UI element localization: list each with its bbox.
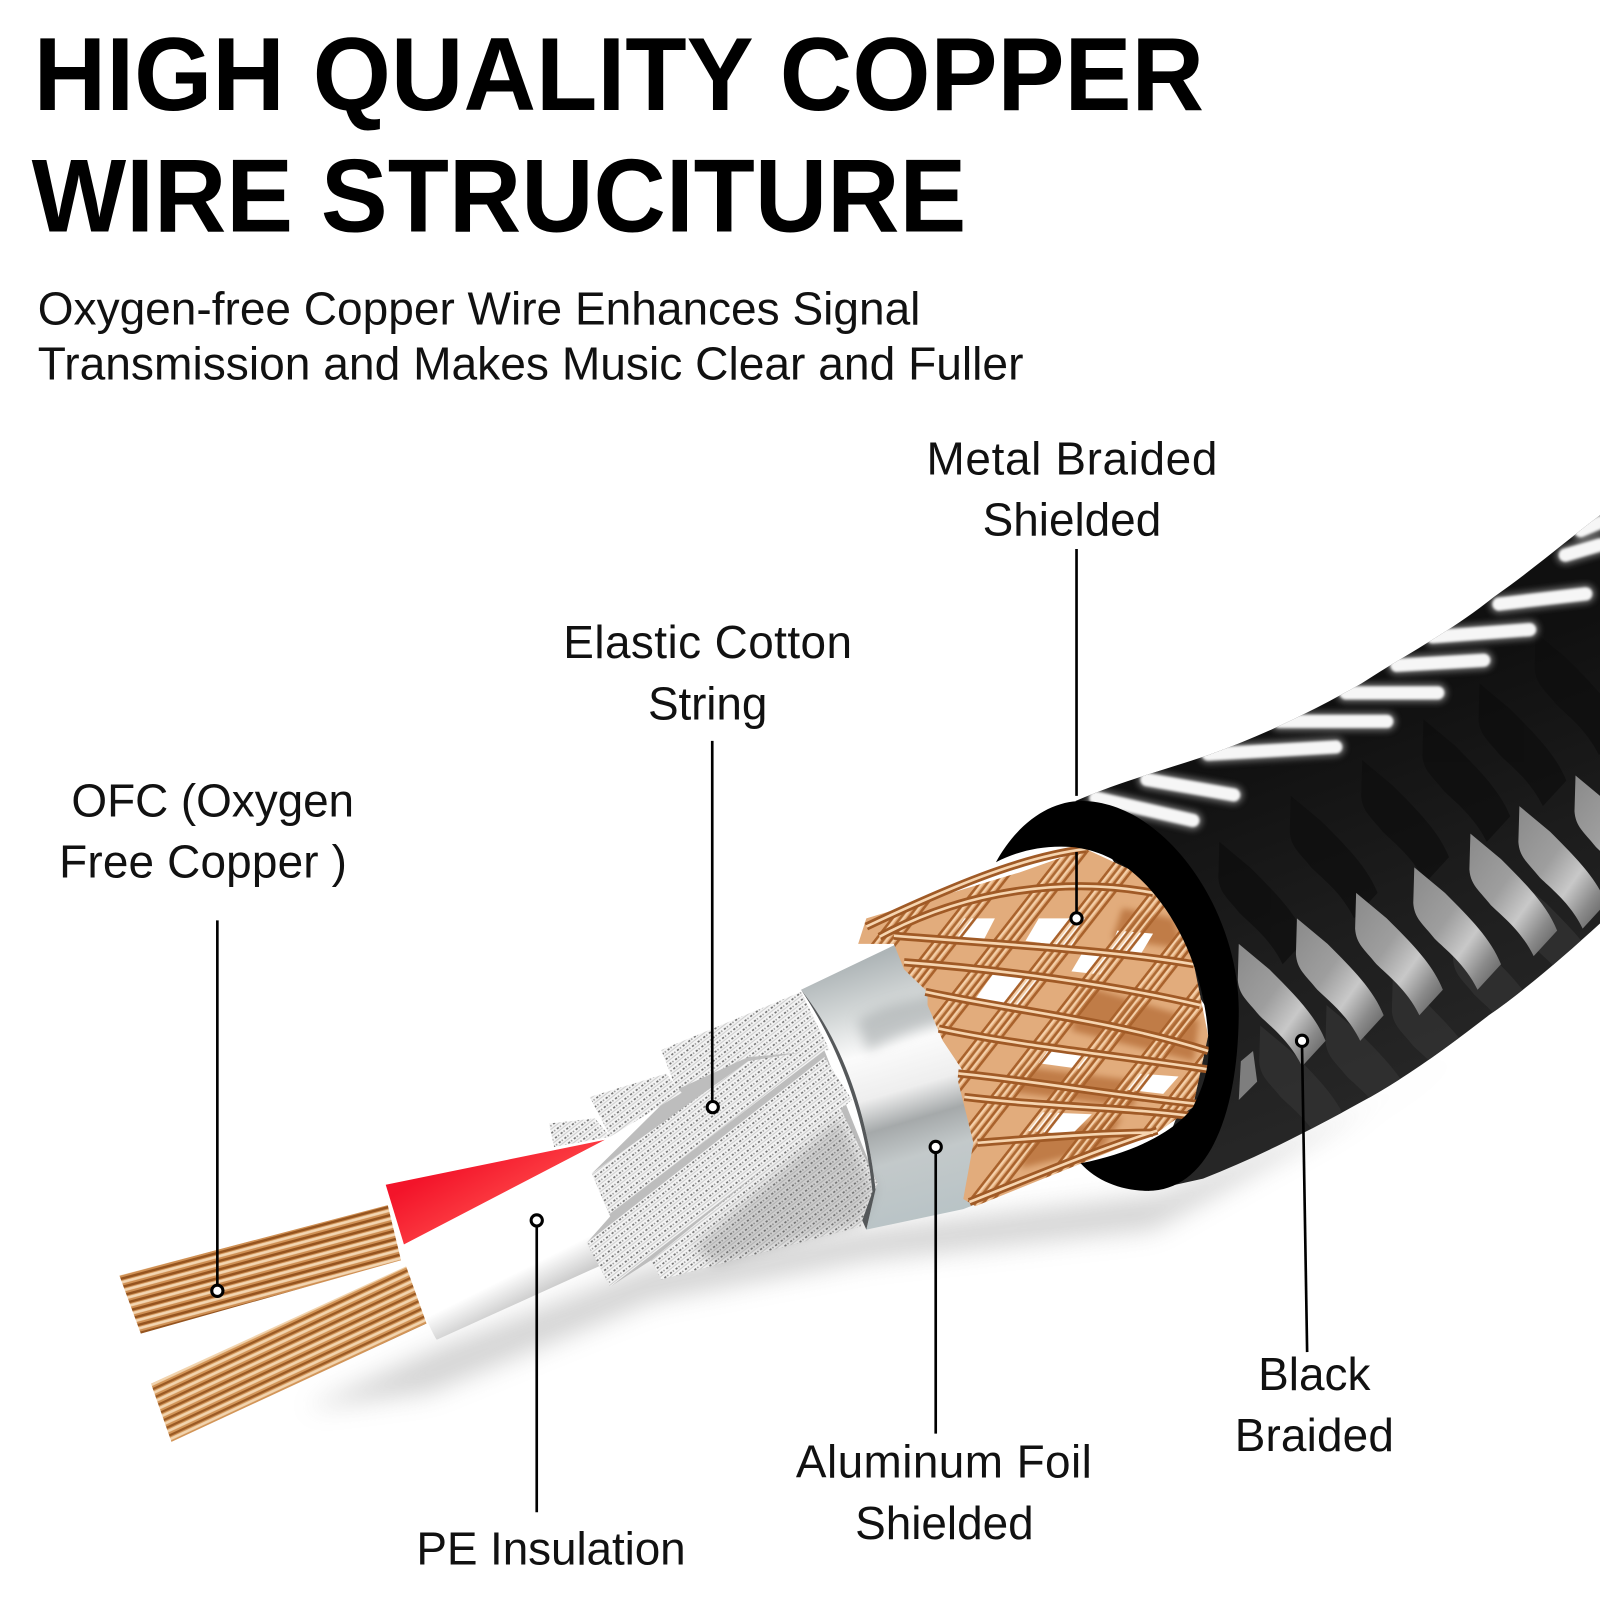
braid orange interior patches (1010, 908, 1199, 1168)
cotton strand 2 (590, 1073, 682, 1137)
label: OFC (Oxygen (71, 774, 354, 826)
title line 1: HIGH QUALITY COPPER (34, 17, 1204, 133)
label: PE Insulation (416, 1522, 686, 1574)
braid long bundles light (866, 849, 1208, 1202)
label: Shielded (855, 1497, 1034, 1549)
title line 2: WIRE STRUCITURE (32, 139, 966, 255)
subtitle line 1: Oxygen-free Copper Wire Enhances Signal (38, 282, 920, 334)
callout: Metal Braided Shielded (927, 432, 1217, 924)
callout: OFC Oxygen Free Copper (59, 774, 354, 1296)
jacket body (1076, 515, 1600, 1191)
braid diagonal weave (858, 849, 1208, 1206)
jacket dark texture (1222, 766, 1566, 964)
cotton strand shade (694, 1117, 876, 1265)
leader line (535, 1227, 538, 1512)
label: Metal Braided (927, 432, 1217, 484)
braid long bundles dark (866, 849, 1208, 1202)
callout: Black Braided (1235, 1035, 1394, 1461)
aluminum foil shield (801, 918, 1194, 1230)
marker (930, 1141, 941, 1153)
foil edge arc (801, 990, 876, 1230)
marker (1296, 1035, 1308, 1046)
label: Aluminum Foil (796, 1436, 1092, 1488)
title (32, 17, 1204, 255)
jacket end ring (996, 801, 1239, 1191)
top white braid streaks (1096, 522, 1600, 820)
marker (212, 1285, 223, 1296)
red insulation (386, 1140, 605, 1245)
leader line (711, 741, 714, 1102)
marker (531, 1215, 542, 1226)
cotton strand 6 (651, 1107, 878, 1280)
leader line (216, 920, 219, 1286)
small chevron by ring (1239, 1051, 1257, 1100)
leader line (1302, 1047, 1307, 1352)
leader line (1075, 549, 1078, 913)
label: Braided (1235, 1409, 1394, 1461)
cotton strand 4 (592, 1048, 828, 1214)
subtitle line 2: Transmission and Makes Music Clear and Fuller (38, 338, 1023, 390)
cotton base shade (587, 992, 878, 1287)
callout: Elastic Cotton String (563, 616, 852, 1113)
marker (1071, 913, 1082, 924)
label: String (648, 677, 767, 729)
cable cross-section illustration (119, 515, 1600, 1442)
lower copper conductor (151, 1266, 427, 1442)
callout: PE Insulation (416, 1215, 686, 1574)
label: Shielded (983, 494, 1161, 546)
upper copper conductor (119, 1205, 401, 1334)
cotton strand 1 (549, 1118, 610, 1147)
braid base (858, 849, 1208, 1206)
jacket lower weave (1260, 892, 1581, 1129)
leader line (934, 1153, 937, 1434)
black braided jacket (1076, 515, 1600, 1191)
metal braided shield (858, 849, 1208, 1206)
marker (707, 1102, 718, 1113)
elastic cotton strings (549, 992, 878, 1287)
foil shading blot (857, 985, 949, 1051)
cotton strand 5 (587, 1057, 852, 1287)
grey braid chevrons (1238, 776, 1600, 1066)
callout: Aluminum Foil Shielded (796, 1141, 1092, 1549)
cable drop shadow (306, 1051, 1469, 1408)
subtitle (38, 282, 1023, 390)
label: Elastic Cotton (563, 616, 852, 668)
braid gaps (951, 918, 1179, 1135)
label: Free Copper ) (59, 836, 347, 888)
label: Black (1258, 1348, 1371, 1400)
top braid streak shadows (1096, 522, 1600, 820)
white PE insulation (403, 1112, 694, 1340)
cotton strand 3 (661, 992, 830, 1090)
